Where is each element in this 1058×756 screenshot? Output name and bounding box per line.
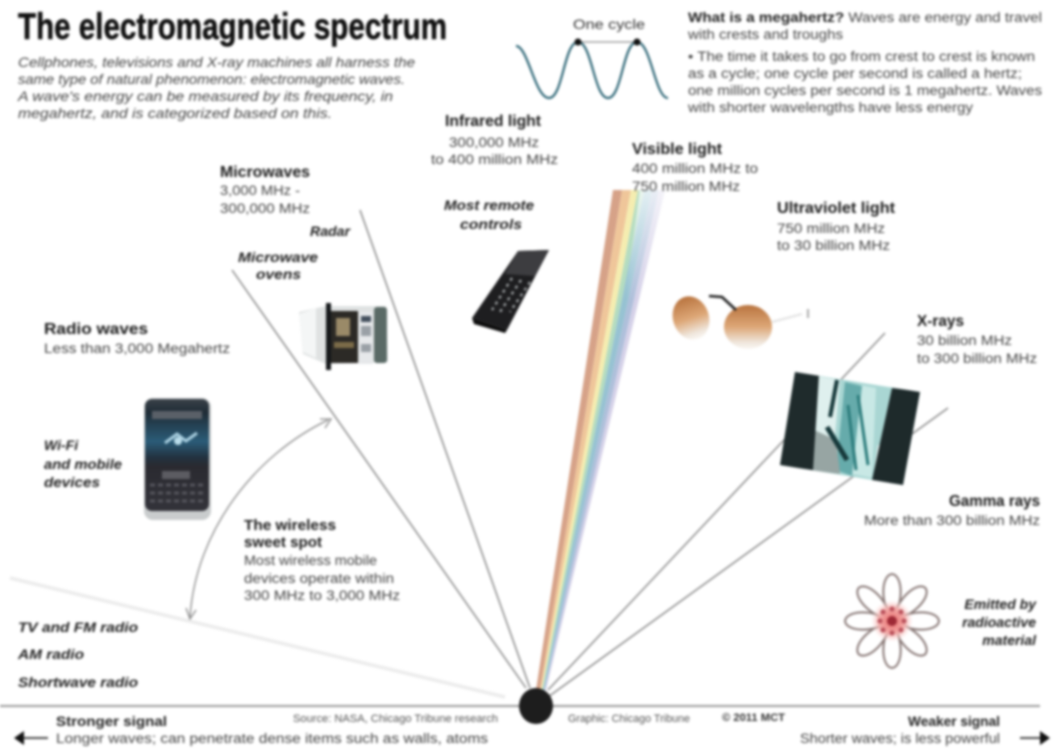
icon: sunglasses bbox=[667, 292, 808, 349]
intro text bbox=[17, 54, 415, 121]
title: The electromagnetic spectrum bbox=[18, 6, 447, 47]
what is a megahertz text: with crests and troughs bbox=[687, 27, 843, 42]
footer credits bbox=[293, 712, 785, 725]
icon: atom bbox=[845, 574, 939, 668]
icon: x-ray image bbox=[778, 370, 922, 487]
label: ultraviolet light bbox=[777, 200, 896, 253]
label: the wireless sweet spot: Most wireless mobile bbox=[244, 553, 377, 568]
label: microwave ovens bbox=[238, 249, 318, 282]
footer credits: © 2011 MCT bbox=[722, 712, 785, 724]
label: wi-fi and mobile devices: and mobile bbox=[44, 456, 122, 472]
what is a megahertz text: What is a megahertz? Waves are energy and travel bbox=[688, 10, 1042, 25]
left arrow bbox=[14, 731, 48, 745]
label: wi-fi and mobile devices: devices bbox=[44, 474, 100, 490]
label: microwave ovens: Microwave bbox=[238, 249, 318, 265]
intro text: megahertz, and is categorized based on this. bbox=[18, 105, 332, 121]
label: most remote controls: controls bbox=[460, 216, 522, 232]
curved arrow: wireless sweet spot range bbox=[186, 419, 331, 619]
weaker signal caption: Shorter waves; is less powerful bbox=[800, 731, 1000, 746]
footer credits: Graphic: Chicago Tribune bbox=[568, 713, 690, 725]
icon: remote control bbox=[472, 250, 549, 333]
label: most remote controls: Most remote bbox=[444, 197, 534, 213]
label: radio waves: Radio waves bbox=[44, 321, 148, 338]
label: microwaves bbox=[220, 164, 310, 216]
label: most remote controls bbox=[444, 197, 534, 232]
label: gamma rays bbox=[864, 493, 1040, 528]
stronger signal caption bbox=[56, 713, 488, 746]
label: gamma rays: Gamma rays bbox=[949, 493, 1040, 510]
origin circle bbox=[519, 688, 553, 724]
label: radio waves bbox=[44, 321, 230, 356]
label: visible light bbox=[632, 141, 758, 194]
stronger signal caption: Stronger signal bbox=[56, 713, 167, 729]
label: x-rays: to 300 billion MHz bbox=[917, 351, 1037, 366]
label: wi-fi and mobile devices: Wi-Fi bbox=[44, 437, 79, 453]
label: ultraviolet light: 750 million MHz bbox=[777, 221, 885, 236]
intro text: A wave's energy can be measured by its frequency, in bbox=[17, 88, 393, 104]
intro text: same type of natural phenomenon: electromagnetic waves. bbox=[18, 71, 405, 87]
rainbow visible light wedge bbox=[536, 188, 668, 690]
label: infrared light: 300,000 MHz bbox=[449, 135, 539, 150]
label: emitted by radioactive material: material bbox=[982, 632, 1037, 648]
label: radio waves: Less than 3,000 Megahertz bbox=[44, 341, 230, 356]
label: x-rays: 30 billion MHz bbox=[917, 333, 1012, 348]
one cycle wave diagram bbox=[516, 16, 668, 98]
what is a megahertz text: as a cycle; one cycle per second is called a hertz; bbox=[688, 66, 1022, 81]
what is a megahertz text: with shorter wavelengths have less energy bbox=[687, 100, 973, 115]
weaker signal caption: Weaker signal bbox=[908, 713, 1000, 729]
right arrow bbox=[1020, 731, 1050, 745]
what is a megahertz text: one million cycles per second is 1 megahertz. Waves bbox=[688, 83, 1042, 98]
label: microwaves: 300,000 MHz bbox=[220, 201, 310, 216]
icon: smartphone bbox=[144, 398, 211, 520]
label: wi-fi and mobile devices bbox=[44, 437, 122, 490]
label: infrared light bbox=[431, 113, 558, 167]
label: radio bands: TV and FM radio bbox=[18, 619, 138, 635]
label: visible light: Visible light bbox=[632, 141, 723, 158]
one cycle wave diagram: One cycle bbox=[573, 16, 645, 32]
label: the wireless sweet spot: sweet spot bbox=[244, 535, 322, 551]
label: ultraviolet light: Ultraviolet light bbox=[777, 200, 896, 217]
label: radio bands: AM radio bbox=[17, 646, 84, 662]
label: x-rays bbox=[917, 313, 1037, 366]
label: the wireless sweet spot bbox=[244, 518, 400, 603]
label: microwaves: Microwaves bbox=[220, 164, 310, 181]
baseline rule bbox=[0, 705, 1040, 707]
label: visible light: 750 million MHz bbox=[632, 179, 740, 194]
label: emitted by radioactive material bbox=[962, 596, 1037, 648]
label: infrared light: Infrared light bbox=[445, 113, 542, 130]
label: the wireless sweet spot: devices operate within bbox=[244, 571, 394, 586]
intro text: Cellphones, televisions and X-ray machines all harness the bbox=[18, 54, 415, 70]
label: radar: Radar bbox=[310, 223, 352, 239]
label: x-rays: X-rays bbox=[917, 313, 964, 330]
label: the wireless sweet spot: 300 MHz to 3,000 MHz bbox=[244, 588, 400, 603]
label: microwaves: 3,000 MHz - bbox=[220, 183, 300, 198]
label: emitted by radioactive material: Emitted by bbox=[964, 596, 1037, 612]
label: ultraviolet light: to 30 billion MHz bbox=[777, 238, 890, 253]
weaker signal caption bbox=[800, 713, 1000, 746]
footer credits: Source: NASA, Chicago Tribune research bbox=[293, 713, 498, 725]
what is a megahertz text bbox=[687, 10, 1042, 115]
label: radio bands: Shortwave radio bbox=[18, 674, 138, 690]
stronger signal caption: Longer waves; can penetrate dense items such as walls, atoms bbox=[56, 731, 488, 746]
what is a megahertz text: • The time it takes to go from crest to crest is known bbox=[688, 49, 1035, 64]
label: emitted by radioactive material: radioactive bbox=[962, 614, 1036, 630]
label: visible light: 400 million MHz to bbox=[632, 161, 758, 176]
label: gamma rays: More than 300 billion MHz bbox=[864, 513, 1040, 528]
spectrum divider lines bbox=[232, 210, 948, 697]
icon: microwave oven bbox=[299, 303, 388, 370]
label: the wireless sweet spot: The wireless bbox=[244, 518, 336, 534]
label: radio bands bbox=[17, 619, 138, 690]
label: infrared light: to 400 million MHz bbox=[431, 152, 558, 167]
label: microwave ovens: ovens bbox=[256, 266, 301, 282]
